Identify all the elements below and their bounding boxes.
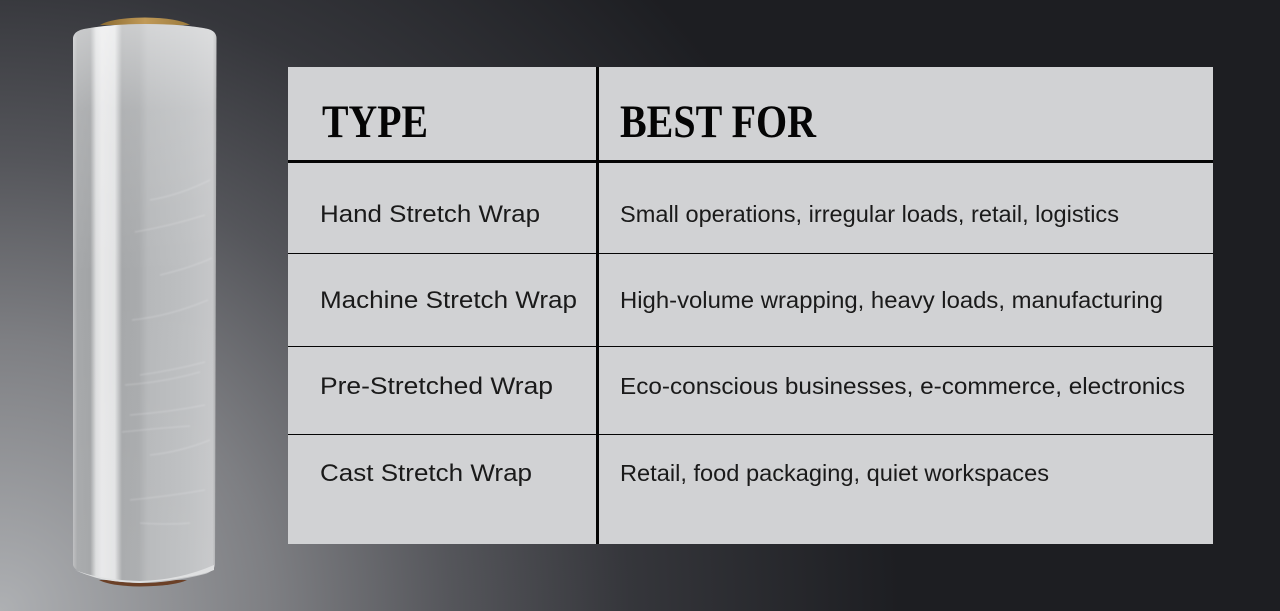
row 3 type: Pre-Stretched Wrap	[320, 373, 553, 400]
row 1 type: Hand Stretch Wrap	[320, 201, 540, 228]
row 1 best for: Small operations, irregular loads, retail, logistics	[620, 201, 1119, 227]
column rule	[596, 67, 599, 544]
row 3 best for: Eco-conscious businesses, e-commerce, electronics	[620, 373, 1185, 399]
heading: type: TYPE	[322, 96, 428, 148]
heading: best for: BEST FOR	[620, 96, 817, 148]
film texture	[122, 180, 212, 524]
row 2 best for: High-volume wrapping, heavy loads, manufacturing	[620, 287, 1163, 313]
row 4 type: Cast Stretch Wrap	[320, 460, 532, 487]
row 2 type: Machine Stretch Wrap	[320, 287, 577, 314]
cardboard core top	[100, 18, 190, 25]
row 4 best for: Retail, food packaging, quiet workspaces	[620, 460, 1049, 486]
product image: stretch wrap roll	[73, 18, 216, 586]
table background	[288, 67, 1213, 544]
header rule	[288, 160, 1213, 163]
roll body	[73, 24, 216, 583]
table panel	[288, 67, 1213, 544]
row rules	[288, 253, 1213, 254]
roll shading	[73, 24, 216, 583]
bottom rim	[75, 565, 214, 583]
cardboard core bottom	[99, 580, 187, 586]
